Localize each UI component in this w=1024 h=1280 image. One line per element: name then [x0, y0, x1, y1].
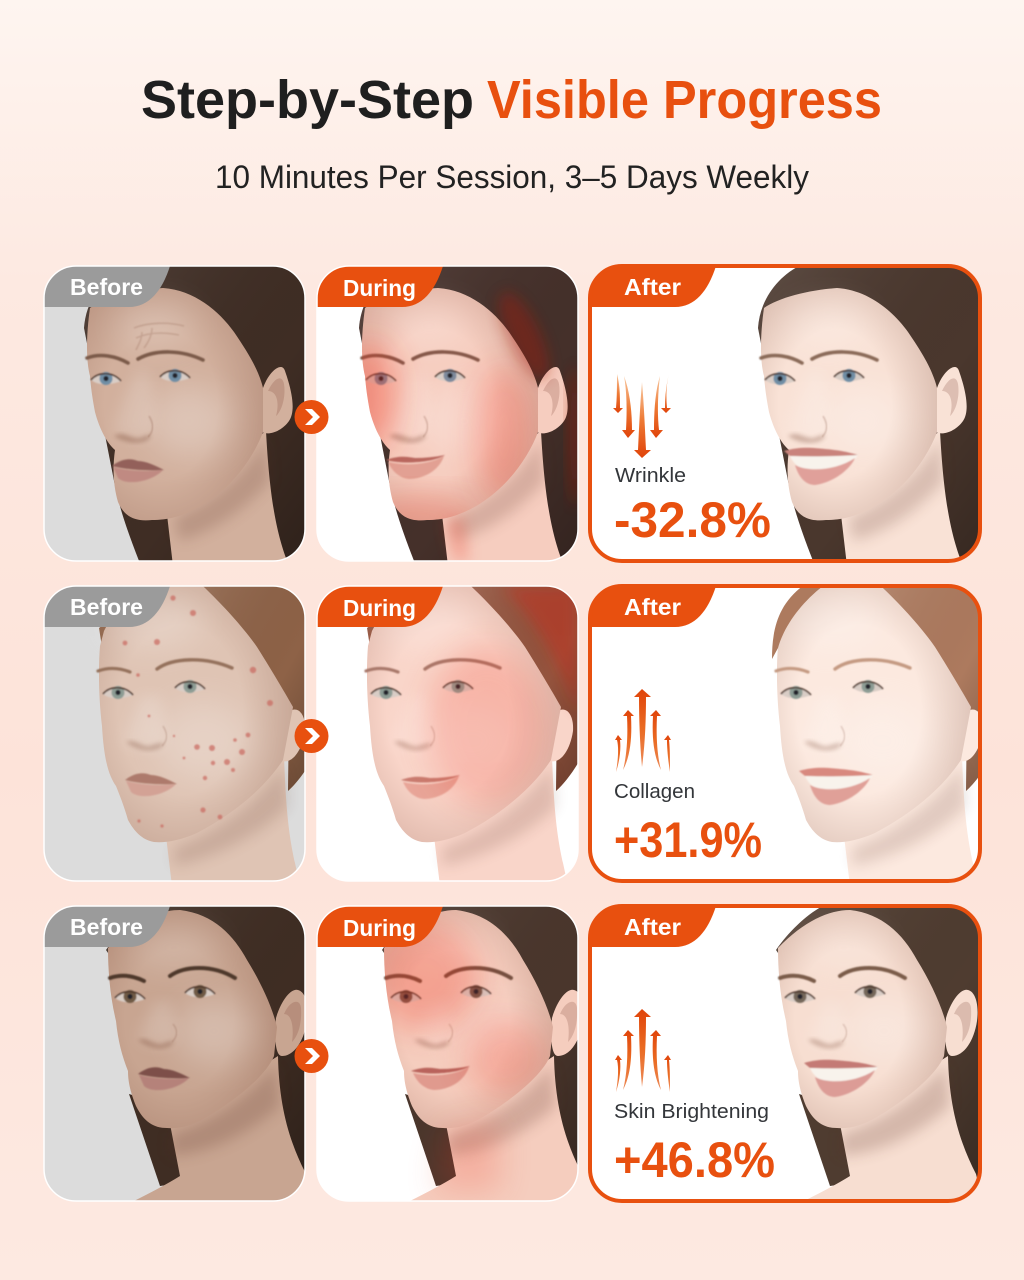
arrow: row 1 — [294, 400, 328, 434]
title — [141, 70, 882, 130]
subtitle: 10 Minutes Per Session, 3–5 Days Weekly — [215, 159, 809, 195]
stat: skin brightening change: +46.8% — [614, 1132, 775, 1188]
panel: row 2 before — [44, 578, 314, 886]
icon: collagen up arrows — [615, 689, 671, 772]
label: wrinkle: Wrinkle — [615, 465, 686, 487]
arrow: row 2 — [294, 719, 328, 753]
panel: row 2 during: During — [343, 595, 416, 621]
panel: row 1 during — [317, 261, 589, 566]
panel: row 3 during: During — [343, 915, 416, 941]
title: Step-by-Step — [141, 70, 474, 130]
panel: row 1 before: Before — [70, 274, 143, 300]
panel: row 3 before — [44, 898, 314, 1206]
icon: wrinkle down arrows — [613, 374, 671, 458]
panel: row 1 after: After — [624, 274, 681, 300]
panel: row 1 after — [590, 261, 988, 566]
panel: row 2 after: After — [624, 594, 681, 620]
panel: row 1 before — [44, 261, 314, 566]
panel: row 2 after — [590, 578, 992, 886]
panel: row 3 after: After — [624, 914, 681, 940]
label: skin brightening: Skin Brightening — [614, 1101, 769, 1123]
title: Visible Progress — [487, 70, 882, 130]
stat: wrinkle change: -32.8% — [614, 492, 771, 548]
label: collagen: Collagen — [614, 781, 695, 803]
arrow: row 3 — [294, 1039, 328, 1073]
stat: collagen change: +31.9% — [614, 812, 762, 868]
panel: row 3 before: Before — [70, 914, 143, 940]
panel: row 2 during — [317, 578, 582, 886]
icon: skin brightening up arrows — [615, 1009, 671, 1092]
panel: row 3 during — [317, 898, 590, 1206]
panel: row 3 after — [590, 898, 984, 1206]
panel: row 2 before: Before — [70, 594, 143, 620]
panel: row 1 during: During — [343, 275, 416, 301]
